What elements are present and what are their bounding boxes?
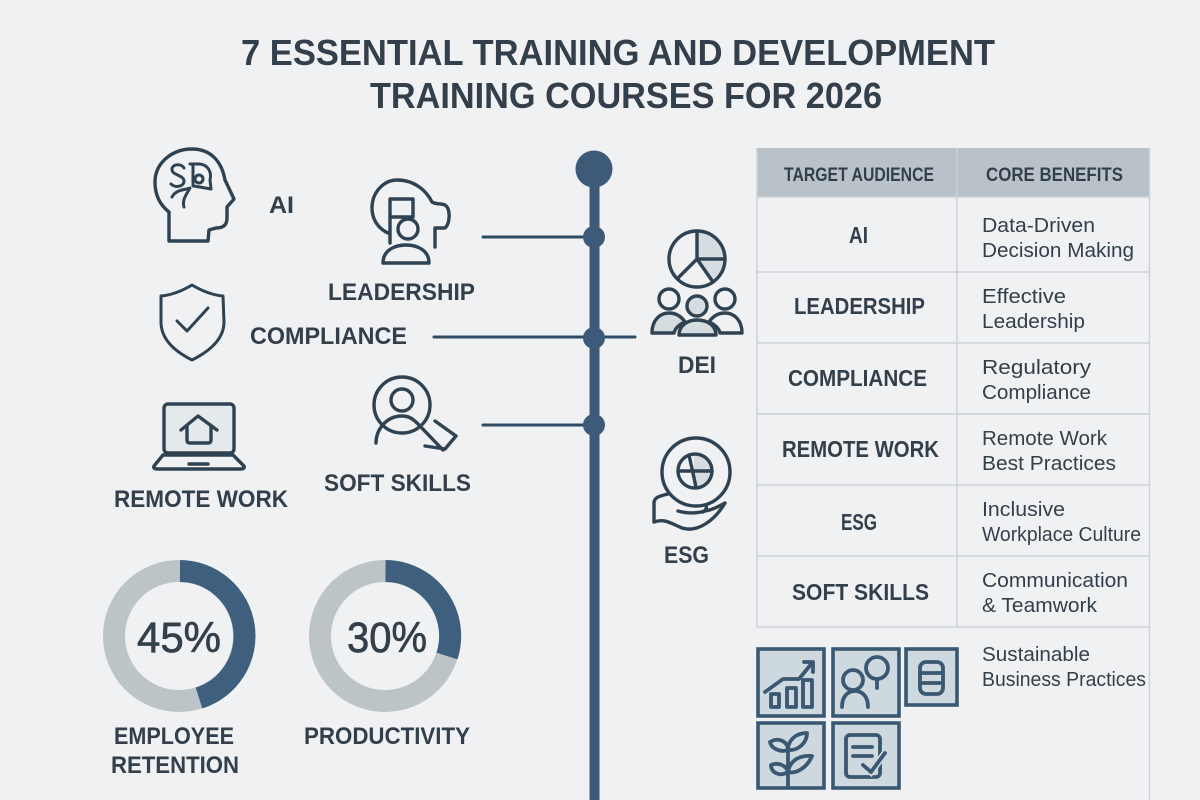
label: ESG: ESG <box>664 542 709 569</box>
row: soft skills: Communication <box>982 570 1128 592</box>
icon: AI head with brain <box>155 149 234 241</box>
icon: DEI pie and people <box>652 231 742 335</box>
label: employee retention <box>111 723 239 779</box>
icon: leadership <box>372 180 449 263</box>
row: remote work: Remote Work <box>982 428 1108 450</box>
icon: compliance shield <box>161 285 224 360</box>
table header <box>757 148 1150 197</box>
title: TRAINING COURSES FOR 2026 <box>370 75 882 116</box>
icon: ESG globe in hand <box>654 438 730 529</box>
row: AI: Decision Making <box>982 240 1134 262</box>
text: sustainable business practices: Sustainable <box>982 644 1090 666</box>
row: remote work <box>782 428 1116 475</box>
icon: remote work laptop <box>154 404 244 469</box>
table header: CORE BENEFITS <box>986 165 1123 186</box>
label: DEI: DEI <box>678 352 716 379</box>
row: leadership: Leadership <box>982 311 1085 333</box>
row: soft skills: SOFT SKILLS <box>792 579 929 605</box>
row: ESG: Inclusive <box>982 499 1065 521</box>
icon tile: person and balloon <box>833 649 899 716</box>
row: leadership: Effective <box>982 286 1066 308</box>
text: sustainable business practices <box>982 644 1146 691</box>
icon tile: database <box>906 649 957 705</box>
row: leadership <box>794 286 1085 333</box>
row: remote work: REMOTE WORK <box>782 436 939 462</box>
label: AI: AI <box>269 192 294 219</box>
label: employee retention: RETENTION <box>111 752 239 779</box>
title: 7 ESSENTIAL TRAINING AND DEVELOPMENT <box>241 32 995 73</box>
table header: TARGET AUDIENCE <box>784 165 934 186</box>
donut chart: 45% employee retention <box>114 571 244 701</box>
icon tile: checklist document <box>833 723 899 788</box>
row: compliance <box>788 357 1091 404</box>
row: AI: Data-Driven <box>982 215 1095 237</box>
label: leadership: LEADERSHIP <box>328 279 475 306</box>
donut chart: 30% productivity: 30% <box>347 614 427 662</box>
row: compliance: Compliance <box>982 382 1091 404</box>
row: AI: AI <box>849 222 868 248</box>
row: soft skills: & Teamwork <box>982 595 1098 617</box>
row: compliance: Regulatory <box>982 357 1091 379</box>
label: employee retention: EMPLOYEE <box>114 723 234 750</box>
row: compliance: COMPLIANCE <box>788 365 927 391</box>
row: ESG: ESG <box>841 509 877 535</box>
row: ESG <box>841 499 1141 546</box>
row: AI <box>849 215 1134 262</box>
title <box>241 32 995 116</box>
row: leadership: LEADERSHIP <box>794 293 925 319</box>
label: soft skills: SOFT SKILLS <box>324 470 471 497</box>
donut chart: 45% employee retention: 45% <box>137 614 221 662</box>
icon: soft skills <box>374 377 456 450</box>
donut chart: 30% productivity <box>320 571 450 701</box>
row: remote work: Best Practices <box>982 453 1116 475</box>
row: soft skills <box>792 570 1128 617</box>
label: productivity: PRODUCTIVITY <box>304 723 470 750</box>
text: sustainable business practices: Business Practices <box>982 669 1146 691</box>
label: compliance: COMPLIANCE <box>250 323 407 350</box>
icon tile: plant <box>758 723 824 788</box>
table: audience and benefits <box>757 148 1150 800</box>
row: ESG: Workplace Culture <box>982 524 1141 546</box>
label: remote work: REMOTE WORK <box>114 486 289 513</box>
timeline spine with nodes and connectors <box>434 150 635 800</box>
icon tile: growth chart <box>758 649 824 716</box>
